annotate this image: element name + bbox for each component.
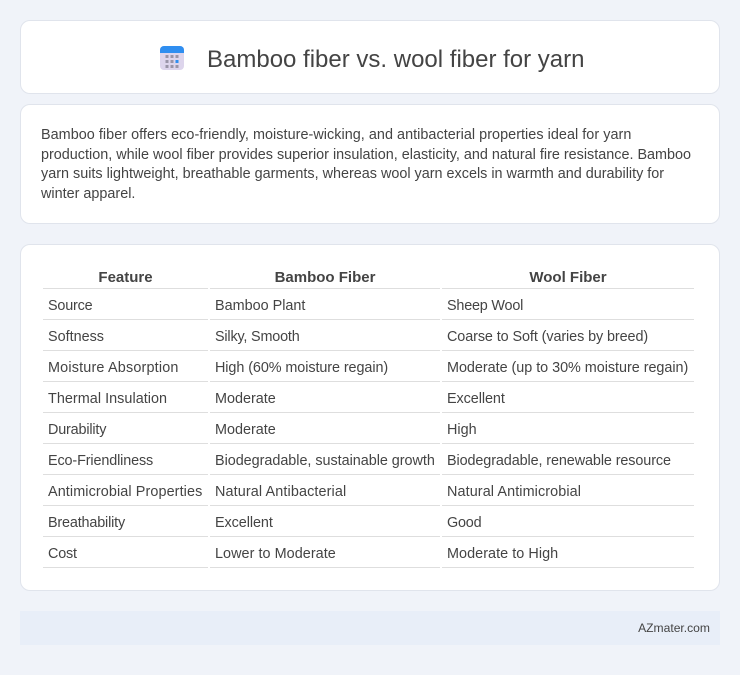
comparison table: Moisture Absorption <box>48 360 179 376</box>
header: Bamboo Fiber: Bamboo Fiber <box>275 269 375 286</box>
text block: intro: production, while wool fiber provides superior insulation, elasticity, and natural fire resistance. Bamboo <box>41 146 691 162</box>
footer text: AZmater.com: AZmater.com <box>638 621 710 635</box>
comparison table: Coarse to Soft (varies by breed) <box>447 329 648 345</box>
comparison table: Antimicrobial Properties <box>48 484 202 500</box>
panel: comparison table card <box>20 244 720 591</box>
comparison table: Biodegradable, sustainable growth <box>215 453 435 469</box>
comparison table: Excellent <box>447 391 505 407</box>
comparison table: Breathability <box>48 515 125 531</box>
comparison table: Excellent <box>215 515 273 531</box>
comparison table: Sheep Wool <box>447 298 523 314</box>
header: Feature: Feature <box>98 269 153 286</box>
text block: intro: winter apparel. <box>41 186 135 202</box>
comparison table: High (60% moisture regain) <box>215 360 388 376</box>
comparison table: Moderate to High <box>447 546 558 562</box>
comparison table: Thermal Insulation <box>48 391 167 407</box>
comparison table: Natural Antibacterial <box>215 484 346 500</box>
text block: intro: Bamboo fiber offers eco-friendly, moisture-wicking, and antibacterial properties ideal for yarn <box>41 127 631 143</box>
comparison table: Moderate (up to 30% moisture regain) <box>447 360 688 376</box>
comparison table: Biodegradable, renewable resource <box>447 453 671 469</box>
comparison table <box>43 269 694 568</box>
comparison table: Good <box>447 515 481 531</box>
comparison table: Durability <box>48 422 106 438</box>
footer bar <box>20 611 720 645</box>
text block: intro <box>41 127 691 202</box>
panel: intro text card <box>20 104 720 224</box>
comparison table: Eco-Friendliness <box>48 453 153 469</box>
comparison table: Moderate <box>215 422 276 438</box>
comparison table: Source <box>48 298 92 314</box>
comparison table: Cost <box>48 546 77 562</box>
comparison table: Silky, Smooth <box>215 329 300 345</box>
comparison table: Moderate <box>215 391 276 407</box>
comparison table: High <box>447 422 477 438</box>
header: Wool Fiber: Wool Fiber <box>529 269 607 286</box>
panel: title card <box>20 20 720 94</box>
icon: calendar <box>160 46 184 70</box>
comparison table: Natural Antimicrobial <box>447 484 581 500</box>
comparison table: Softness <box>48 329 104 345</box>
comparison table: Lower to Moderate <box>215 546 336 562</box>
text block: intro: yarn suits lightweight, breathable garments, whereas wool yarn excels in warmth and durability for <box>41 166 664 182</box>
comparison table: Bamboo Plant <box>215 298 305 314</box>
title: Bamboo fiber vs. wool fiber for yarn <box>207 46 584 73</box>
